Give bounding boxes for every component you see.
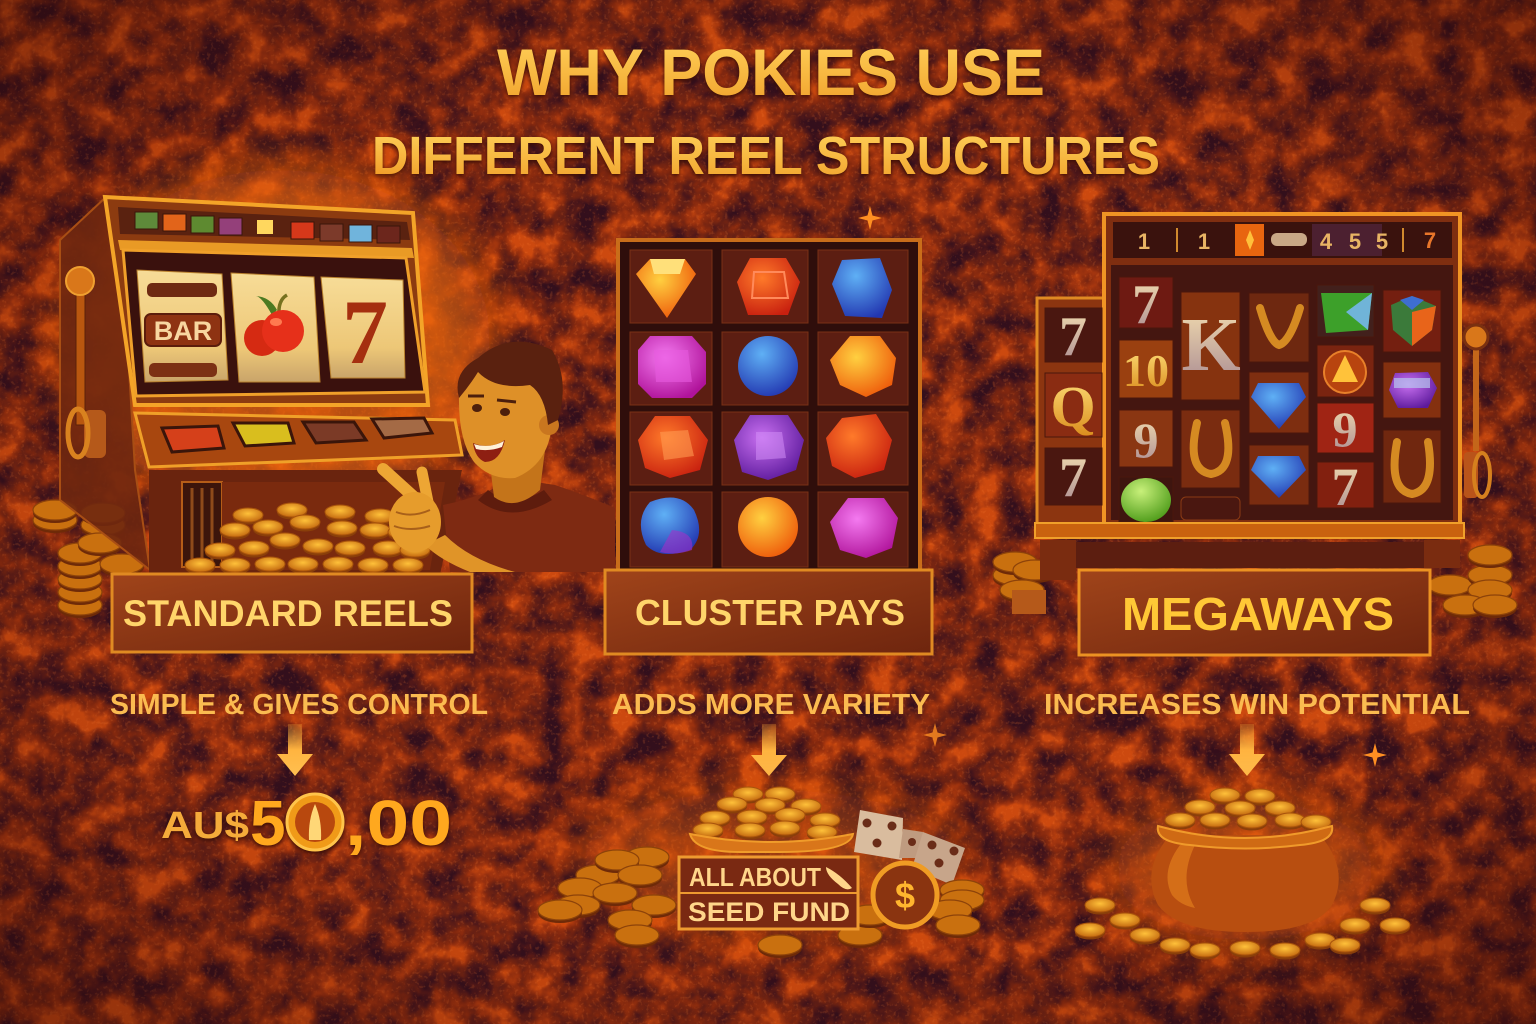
caption: cluster pays: ADDS MORE VARIETY: [612, 689, 930, 721]
card symbols: 7: [1132, 274, 1160, 336]
dice: [854, 810, 965, 885]
coin pile right: [758, 880, 984, 958]
gem grid frame: [618, 240, 920, 572]
card symbols: 9: [1332, 401, 1358, 457]
button deck: [135, 413, 462, 467]
dollar coin: $: [895, 875, 915, 916]
horseshoes: [1194, 308, 1430, 494]
gem: orange: [738, 497, 798, 557]
banner: cluster pays: [605, 570, 932, 654]
gem: purple: [734, 415, 804, 480]
amount: AU$5 coin ,00: [161, 787, 452, 859]
coin pile under machine: [185, 503, 430, 574]
gem: orange diamond: [636, 259, 696, 318]
megaways machine: [1035, 214, 1490, 580]
reel 1: BAR: BAR: [154, 316, 212, 346]
buttons: [162, 418, 432, 452]
screen: [123, 250, 425, 396]
gem: pink: [830, 498, 898, 558]
sign: all about seed fund: [679, 857, 858, 929]
card symbols: 7: [1059, 306, 1087, 368]
banner: megaways: [1079, 570, 1430, 655]
gem: blue: [832, 258, 892, 318]
cabinet side: [60, 197, 150, 570]
slot machine: [60, 197, 462, 575]
card symbols: 9: [1134, 412, 1158, 468]
caption: standard reels: SIMPLE & GIVES CONTROL: [110, 689, 488, 721]
dollar coin: [873, 863, 937, 927]
lever: [1464, 325, 1490, 498]
amount: AU$5 coin ,00: 5: [250, 787, 286, 859]
card symbols: 7: [1059, 447, 1087, 509]
top number bar: 5: [1376, 229, 1388, 254]
top number bar: 7: [1424, 228, 1436, 253]
amount: AU$5 coin ,00: AU$: [161, 805, 249, 847]
indicator lights: [135, 212, 400, 243]
gem: red orange: [638, 416, 708, 478]
top number bar: 4: [1320, 229, 1333, 254]
symbol cells: [1045, 277, 1441, 522]
machine coin stacks: [993, 545, 1517, 618]
arrow: standard reels: [277, 724, 313, 776]
coins around pot: [1075, 898, 1410, 960]
top number bar: 1: [1198, 229, 1210, 254]
top number bar: 5: [1349, 229, 1361, 254]
banner: standard reels: [112, 574, 472, 652]
coin pile left of sign: [538, 847, 676, 948]
sign: all about seed fund: ALL ABOUT: [689, 862, 821, 892]
caption: megaways: INCREASES WIN POTENTIAL: [1044, 689, 1470, 721]
card symbols: 10: [1123, 345, 1169, 396]
card symbols: 7: [1332, 457, 1358, 517]
coin stacks left of machine: [33, 500, 144, 618]
reel 1: BAR: [137, 270, 228, 382]
cabinet base: [149, 470, 462, 575]
amount: AU$5 coin ,00: ,00: [345, 787, 452, 859]
sign: all about seed fund: SEED FUND: [688, 897, 850, 927]
card symbols: [1050, 274, 1358, 517]
top number bar: 1: [1138, 229, 1150, 254]
reel 2: cherry: [231, 273, 320, 382]
title: WHY POKIES USE: [497, 35, 1045, 109]
gem: orange round: [830, 336, 896, 397]
title: DIFFERENT REEL STRUCTURES: [372, 126, 1160, 186]
coin bowl: [690, 787, 853, 852]
machine glow: [70, 170, 490, 510]
title: [372, 35, 1160, 186]
cabinet head: [105, 197, 428, 405]
banner: cluster pays: CLUSTER PAYS: [635, 592, 905, 633]
blue diamonds and gems: [1121, 293, 1437, 522]
reel 3: seven: 7: [342, 281, 388, 383]
cabinet frames: [1037, 298, 1111, 524]
gem: orange red: [826, 414, 892, 478]
banner: megaways: MEGAWAYS: [1122, 588, 1394, 640]
panel: standard reels: [33, 170, 615, 859]
gem: blue cobalt: [641, 498, 699, 554]
arrow: cluster pays: [751, 724, 787, 776]
gem: magenta: [638, 336, 706, 398]
top number bar: [1113, 222, 1452, 258]
gem: blue round: [738, 336, 798, 396]
arrow: megaways: [1229, 724, 1265, 776]
reel 3: seven: [321, 277, 405, 383]
lever: [66, 267, 106, 458]
pot of gold: [1115, 788, 1375, 940]
shelf: [1035, 523, 1464, 538]
card symbols: K: [1181, 303, 1241, 387]
panel: cluster pays: [538, 240, 984, 958]
pointing hand: [383, 469, 515, 572]
card symbols: Q: [1050, 374, 1096, 439]
man pointing: [383, 342, 615, 572]
gem: red: [737, 258, 800, 315]
panel: megaways: [993, 214, 1517, 960]
coin bowl glow: [580, 790, 960, 930]
banner: standard reels: STANDARD REELS: [123, 593, 453, 634]
